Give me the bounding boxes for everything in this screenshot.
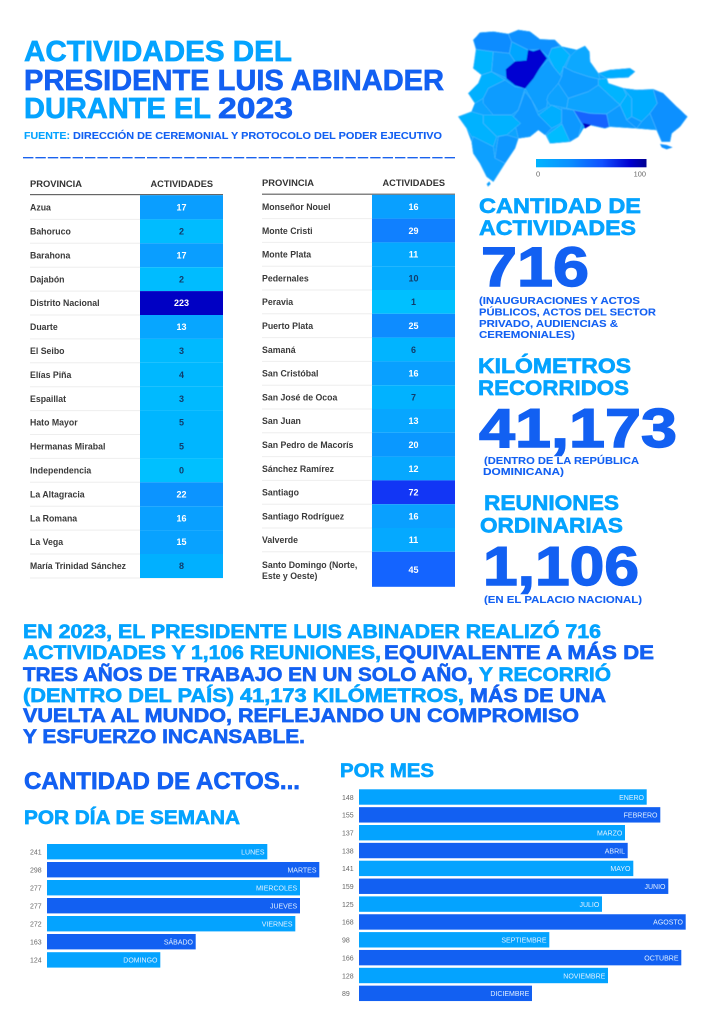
table: provinces right: ACTIVIDADES bbox=[382, 177, 445, 188]
table: provinces right: Valverde bbox=[262, 535, 298, 545]
table: provinces left: Elías Piña bbox=[30, 370, 71, 380]
table: provinces right: 20 bbox=[408, 440, 419, 450]
table: provinces left: Duarte bbox=[30, 322, 58, 332]
bar chart: por día de semana: 277 bbox=[30, 904, 42, 910]
table: provinces left: 16 bbox=[176, 513, 187, 523]
bar chart: por día de semana: 298 bbox=[30, 868, 42, 874]
bar chart: por mes: FEBRERO bbox=[624, 813, 658, 820]
bar chart: por mes: 137 bbox=[342, 830, 354, 838]
table: provinces left: Hermanas Mirabal bbox=[30, 442, 105, 452]
map legend: 0 bbox=[536, 170, 540, 178]
bar chart: por mes bbox=[342, 789, 686, 1001]
summary paragraph: VUELTA AL MUNDO, REFLEJANDO UN COMPROMISO bbox=[23, 705, 579, 727]
map: provinces of the Dominican Republic bbox=[458, 30, 687, 187]
bar chart: por mes: 159 bbox=[342, 884, 354, 891]
summary paragraph bbox=[23, 619, 654, 748]
title: DURANTE EL bbox=[24, 93, 211, 125]
bar chart: por día de semana: SÁBADO bbox=[164, 938, 194, 946]
table: provinces left: Bahoruco bbox=[30, 226, 71, 236]
stat: reuniones ordinarias: 1,106 bbox=[483, 535, 639, 597]
table: provinces right: 6 bbox=[411, 345, 416, 355]
table: provinces left: Hato Mayor bbox=[30, 418, 78, 428]
table: provinces left: María Trinidad Sánchez bbox=[30, 561, 127, 571]
table: provinces right: 11 bbox=[409, 535, 418, 545]
table: provinces left: 15 bbox=[176, 537, 187, 547]
summary paragraph: EQUIVALENTE A MÁS DE bbox=[384, 641, 654, 664]
table: provinces right: Santiago Rodríguez bbox=[262, 511, 345, 521]
bar chart: por mes: 98 bbox=[342, 938, 350, 945]
table: provinces right: 16 bbox=[408, 511, 419, 521]
bar chart: por mes: AGOSTO bbox=[653, 920, 684, 927]
bar chart: por mes: NOVIEMBRE bbox=[563, 973, 606, 980]
source line: DIRECCIÓN DE CEREMONIAL Y PROTOCOLO DEL PODER EJECUTIVO bbox=[73, 130, 442, 142]
table: provinces right: Monte Cristi bbox=[262, 226, 313, 236]
table: provinces right: 7 bbox=[411, 392, 416, 402]
table: provinces right: 25 bbox=[408, 321, 419, 331]
stat: cantidad de actividades: PRIVADO, AUDIENCIAS & bbox=[479, 319, 619, 330]
table: provinces right: Sánchez Ramírez bbox=[262, 464, 335, 474]
table: provinces left: Independencia bbox=[30, 466, 91, 476]
table: provinces left: 2 bbox=[179, 274, 184, 284]
table: provinces left: 8 bbox=[179, 561, 184, 571]
table: provinces right: 13 bbox=[408, 416, 419, 426]
table: provinces right: San Juan bbox=[262, 416, 301, 426]
table: provinces right: 16 bbox=[408, 202, 419, 212]
bar chart: por mes: OCTUBRE bbox=[644, 955, 679, 962]
title: PRESIDENTE LUIS ABINADER bbox=[24, 65, 444, 97]
table: provinces left: Distrito Nacional bbox=[30, 298, 100, 308]
bar chart: por mes: MAYO bbox=[610, 866, 631, 873]
table: provinces left: El Seibo bbox=[30, 346, 65, 356]
table: provinces left: La Altagracia bbox=[30, 489, 85, 499]
bar chart: por día de semana: 124 bbox=[30, 958, 42, 965]
table: provinces right: 10 bbox=[408, 273, 419, 283]
bar chart: por mes: 141 bbox=[342, 866, 354, 873]
heading: por mes: POR MES bbox=[340, 760, 434, 782]
bar chart: por día de semana: JUEVES bbox=[270, 904, 298, 910]
map legend bbox=[536, 159, 646, 178]
stat: cantidad de actividades: CANTIDAD DE bbox=[479, 195, 641, 218]
bar chart: por mes: 166 bbox=[342, 955, 354, 962]
summary paragraph: ACTIVIDADES Y 1,106 REUNIONES, bbox=[23, 642, 381, 664]
table: provinces left: Azua bbox=[30, 203, 51, 213]
table: provinces right: 1 bbox=[411, 297, 416, 307]
bar chart: por mes: SEPTIEMBRE bbox=[501, 938, 547, 945]
bar chart: por mes: 148 bbox=[342, 795, 354, 802]
bar chart: por día de semana: 277 bbox=[30, 886, 42, 892]
bar chart: por día de semana: 241 bbox=[30, 850, 42, 856]
title: ACTIVIDADES DEL bbox=[24, 36, 292, 68]
table: provinces left: Dajabón bbox=[30, 274, 65, 284]
bar chart: por mes: MARZO bbox=[597, 830, 623, 838]
stat: cantidad de actividades bbox=[479, 195, 657, 341]
table: provinces left: 5 bbox=[179, 418, 184, 428]
table: provinces left: Barahona bbox=[30, 250, 70, 260]
stat: cantidad de actividades: 716 bbox=[481, 235, 589, 298]
stat: kilómetros recorridos: (DENTRO DE LA REPÚBLICA bbox=[484, 454, 640, 467]
bar chart: por día de semana: VIERNES bbox=[262, 922, 293, 928]
stat: kilómetros recorridos: RECORRIDOS bbox=[478, 377, 629, 400]
bar chart: por día de semana: MIERCOLES bbox=[256, 886, 298, 892]
stat: reuniones ordinarias: REUNIONES bbox=[484, 492, 619, 515]
table: provinces right: 16 bbox=[408, 369, 419, 379]
bar chart: por mes: 168 bbox=[342, 920, 354, 927]
table: provinces right: San José de Ocoa bbox=[262, 392, 338, 402]
bar chart: por mes: ENERO bbox=[619, 795, 645, 802]
heading: por día de semana: POR DÍA DE SEMANA bbox=[24, 806, 240, 829]
stat: reuniones ordinarias: ORDINARIAS bbox=[480, 514, 623, 537]
table: provinces right: Monseñor Nouel bbox=[262, 202, 331, 212]
stat: kilómetros recorridos bbox=[478, 354, 677, 478]
table: provinces right bbox=[262, 177, 455, 587]
source line: FUENTE: bbox=[24, 131, 70, 142]
bar chart: por mes: DICIEMBRE bbox=[490, 991, 530, 998]
bar chart: por mes: JUNIO bbox=[644, 884, 666, 891]
summary paragraph: TRES AÑOS DE TRABAJO EN UN SOLO AÑO, bbox=[23, 663, 473, 686]
bar chart: por mes: 125 bbox=[342, 902, 354, 909]
table: provinces left: 17 bbox=[176, 203, 187, 213]
title bbox=[24, 36, 444, 125]
table: provinces left: 22 bbox=[176, 489, 187, 499]
table: provinces right: 29 bbox=[408, 226, 419, 236]
table: provinces right: 11 bbox=[409, 250, 418, 260]
table: provinces right: 12 bbox=[408, 464, 419, 474]
table: provinces left: ACTIVIDADES bbox=[150, 178, 213, 189]
table: provinces left: 223 bbox=[174, 298, 189, 308]
bar chart: por día de semana: MARTES bbox=[287, 868, 317, 874]
table: provinces left: 13 bbox=[176, 322, 187, 332]
table: provinces left: PROVINCIA bbox=[30, 178, 82, 189]
stat: kilómetros recorridos: 41,173 bbox=[479, 397, 677, 459]
stat: cantidad de actividades: ACTIVIDADES bbox=[479, 217, 636, 240]
summary paragraph: Y RECORRIÓ bbox=[479, 662, 611, 686]
table: provinces left: 17 bbox=[176, 250, 187, 260]
table: provinces left: 3 bbox=[179, 346, 184, 356]
summary paragraph: Y ESFUERZO INCANSABLE. bbox=[23, 726, 305, 748]
table: provinces left: La Vega bbox=[30, 537, 63, 547]
heading: cantidad de actos: CANTIDAD DE ACTOS... bbox=[24, 768, 300, 795]
table: provinces right: Pedernales bbox=[262, 273, 309, 283]
bar chart: por día de semana: DOMINGO bbox=[123, 958, 158, 965]
table: provinces right: Santo Domingo (Norte, bbox=[262, 560, 357, 570]
table: provinces right: Monte Plata bbox=[262, 250, 311, 260]
bar chart: por día de semana: 272 bbox=[30, 922, 42, 928]
stat: cantidad de actividades: CEREMONIALES) bbox=[479, 330, 575, 341]
stat: cantidad de actividades: PÚBLICOS, ACTOS DEL SECTOR bbox=[479, 306, 657, 318]
summary paragraph: (DENTRO DEL PAÍS) 41,173 KILÓMETROS, bbox=[23, 683, 464, 707]
bar chart: por día de semana bbox=[30, 844, 319, 968]
table: provinces right: 45 bbox=[408, 565, 419, 575]
table: provinces right: Samaná bbox=[262, 345, 296, 355]
table: provinces right: Puerto Plata bbox=[262, 321, 313, 331]
table: provinces right: 72 bbox=[408, 488, 419, 498]
table: provinces left: Espaillat bbox=[30, 394, 66, 404]
table: provinces left: La Romana bbox=[30, 513, 77, 523]
bar chart: por mes: JULIO bbox=[579, 902, 600, 909]
table: provinces right: Santiago bbox=[262, 488, 299, 498]
bar chart: por mes: ABRIL bbox=[605, 848, 625, 855]
bar chart: por mes: 89 bbox=[342, 991, 350, 998]
table: provinces left: 0 bbox=[179, 466, 184, 476]
bar chart: por mes: 128 bbox=[342, 973, 354, 980]
bar chart: por mes: 138 bbox=[342, 848, 354, 855]
title: 2023 bbox=[218, 93, 293, 125]
stat: kilómetros recorridos: DOMINICANA) bbox=[483, 467, 564, 478]
table: provinces right: Este y Oeste) bbox=[262, 571, 318, 581]
table: provinces right: PROVINCIA bbox=[262, 177, 314, 188]
table: provinces left: 5 bbox=[179, 442, 184, 452]
stat: kilómetros recorridos: KILÓMETROS bbox=[478, 354, 631, 378]
bar chart: por día de semana: 163 bbox=[30, 940, 42, 946]
summary paragraph: MÁS DE UNA bbox=[470, 684, 606, 707]
bar chart: por día de semana: LUNES bbox=[241, 850, 265, 856]
stat: reuniones ordinarias bbox=[480, 492, 642, 606]
table: provinces left bbox=[30, 178, 223, 578]
table: provinces left: 4 bbox=[179, 370, 184, 380]
summary paragraph: EN 2023, EL PRESIDENTE LUIS ABINADER REALIZÓ 716 bbox=[23, 619, 601, 643]
table: provinces right: San Pedro de Macorís bbox=[262, 440, 354, 450]
stat: cantidad de actividades: (INAUGURACIONES Y ACTOS bbox=[479, 296, 640, 307]
table: provinces right: San Cristóbal bbox=[262, 369, 318, 379]
map legend: 100 bbox=[634, 170, 646, 178]
table: provinces left: 2 bbox=[179, 226, 184, 236]
bar chart: por mes: 155 bbox=[342, 813, 354, 820]
table: provinces left: 3 bbox=[179, 394, 184, 404]
table: provinces right: Peravia bbox=[262, 297, 293, 307]
stat: reuniones ordinarias: (EN EL PALACIO NACIONAL) bbox=[484, 595, 642, 606]
